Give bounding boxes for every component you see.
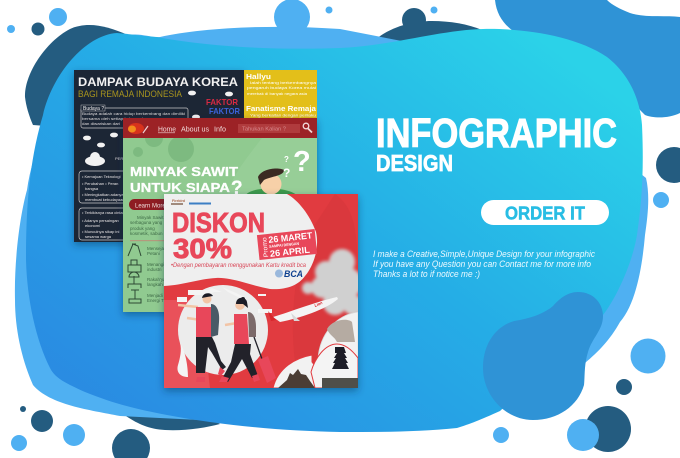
logos: Firebird [172, 199, 185, 203]
heading: Minyak Sawit untuk siapa: UNTUK SIAPA [130, 180, 231, 195]
paragraph: Minyak Sawit [137, 215, 164, 220]
box: effects list: ekonomi [85, 223, 100, 228]
nav bar: Home [158, 126, 176, 134]
button: Learn More: Learn More [135, 204, 166, 210]
nav bar: About us [181, 126, 209, 134]
icons: benefits list [128, 244, 141, 303]
paragraph: kosmetik, sabun [130, 231, 163, 236]
heading: Minyak Sawit untuk siapa [130, 164, 243, 199]
illustration: Bali pagoda [311, 344, 358, 388]
nav bar: Tahukan Kalian ? [242, 126, 286, 132]
label: Faktor blue: FAKTOR [209, 106, 240, 116]
logo: BCA [275, 270, 302, 278]
panel: Hallyu yellow sidebar: Yang berkaitan dengan perilaku [250, 114, 316, 118]
text: benefits list: Rakah'ya [147, 277, 166, 282]
clouds [83, 91, 233, 166]
illustration: boy with question marks [245, 146, 311, 196]
illustration: boy with question marks: ? [283, 166, 290, 180]
heading: 30%: 30% [173, 233, 232, 264]
illustration: landmark temple Borobudur [274, 356, 314, 388]
box: Budaya definition: Budaya adalah cara hidup berkembang dan dimiliki [82, 112, 185, 116]
text: benefits list: Mensejah [147, 246, 167, 251]
heading: Minyak Sawit untuk siapa: MINYAK SAWIT [130, 164, 238, 179]
paragraph: produk yang [130, 226, 155, 231]
paragraph [130, 215, 164, 236]
text: benefits list [147, 246, 167, 303]
box: effects list [79, 208, 139, 240]
box: effects list: • Munculnya sikap ini [82, 229, 120, 234]
search box [238, 124, 300, 133]
label: Faktor red: FAKTOR [206, 97, 238, 107]
button: Order It [481, 200, 609, 225]
text: benefits list: Petani [147, 251, 160, 256]
logos [171, 199, 211, 205]
text: description [373, 249, 595, 279]
illustration: white circle backdrop [178, 285, 268, 375]
subheading: BAGI REMAJA INDONESIA [78, 89, 183, 100]
illustration: female traveller [219, 297, 260, 382]
heading: Hallyu: Hallyu [246, 74, 271, 81]
text: benefits list: Menangi [147, 262, 164, 267]
text: benefits list: Energi T [147, 298, 164, 303]
panel: Hallyu yellow sidebar: Ialah tentang berkembangnya [250, 81, 316, 85]
heading: Fanatisme Remaja: Fanatisme Remaja [246, 106, 316, 113]
logo: BCA: BCA [284, 269, 303, 279]
promo date tag [257, 229, 317, 260]
subtitle: Design: DESIGN [376, 150, 453, 176]
illustration: airplane: Lion [314, 300, 324, 308]
heading: Diskon: DISKON [172, 207, 265, 238]
box: effects list: • Terkikisnya rasa cinta [82, 210, 123, 215]
panel: Hallyu yellow sidebar [244, 70, 317, 120]
box: causes list: bangsa [85, 186, 99, 191]
box: causes list: • Perubahan • Peran [82, 181, 118, 186]
text: description: If you have any Question you can Contact me for more info [373, 259, 591, 269]
box: Budaya definition: Budaya ? [83, 106, 104, 112]
button: Order It: ORDER IT [505, 204, 585, 224]
panel: Korean culture infographic sample [74, 70, 244, 242]
light upper panel [164, 194, 317, 289]
paragraph: serbaguna yang [130, 220, 163, 225]
text: benefits list: langkah [147, 282, 163, 287]
box: causes list: membuat kebudayaan [85, 197, 125, 202]
box: causes list [79, 171, 139, 203]
heading: Dampak Budaya Korea: DAMPAK BUDAYA KOREA [78, 75, 238, 89]
panel: Diskon 30% travel poster [164, 194, 363, 388]
text: payment note: •Dengan pembayaran menggunakan Kartu kredit bca [171, 263, 307, 269]
illustration: suitcase [254, 337, 276, 383]
promo date tag: 26 APRIL [269, 245, 311, 259]
text: description: I make a Creative,Simple,Unique Design for your infographic [373, 249, 595, 259]
box: effects list: sesama warga [85, 234, 112, 239]
icon: magnifier [303, 123, 312, 132]
promo date tag: Promo [261, 237, 270, 258]
box: Budaya definition [81, 105, 188, 128]
box: Budaya definition: bersama oleh setiap kelompok orang [82, 117, 157, 121]
promo date tag: SAMPAI DENGAN [269, 242, 299, 249]
box: causes list: • Meningkatkan adanya [82, 192, 124, 197]
text: benefits list: industri [147, 267, 162, 272]
nav bar: Info [214, 126, 226, 134]
panel: Hallyu yellow sidebar: pengaruh budaya Korea mulai [247, 86, 316, 90]
illustration: airplane [268, 297, 338, 322]
button: Learn More [129, 199, 189, 210]
illustration: smoke cloud [302, 249, 363, 315]
panel: Hallyu yellow sidebar: merebak di banyak negara asia [247, 92, 307, 96]
box: effects list: • Adanya persaingan [82, 218, 119, 223]
illustration: boy with question marks: ? [284, 155, 289, 164]
illustration: boy with question marks: ? [293, 146, 311, 178]
hero decoration [133, 138, 194, 162]
box: causes list: • Kemajuan Teknologi [82, 174, 121, 179]
text: benefits list: Menjadi [147, 293, 163, 298]
heading: Minyak Sawit untuk siapa: ? [231, 178, 243, 199]
box: Budaya definition: dan diwariskan dari [82, 122, 120, 126]
nav bar [123, 118, 317, 138]
text: description: Thanks a lot to if notice me :) [373, 269, 480, 279]
illustration: male traveller [178, 293, 226, 382]
panel: Minyak Sawit web page sample [123, 118, 317, 312]
title: Infographic: INFOGRAPHIC [376, 110, 617, 156]
illustration: Merlion statue [318, 312, 358, 357]
promo date tag: 26 MARET [268, 230, 313, 245]
icon: logo [128, 123, 148, 134]
illustration: decorative foliage and clouds [177, 287, 272, 377]
text: Perubahan label: PER [115, 156, 123, 161]
